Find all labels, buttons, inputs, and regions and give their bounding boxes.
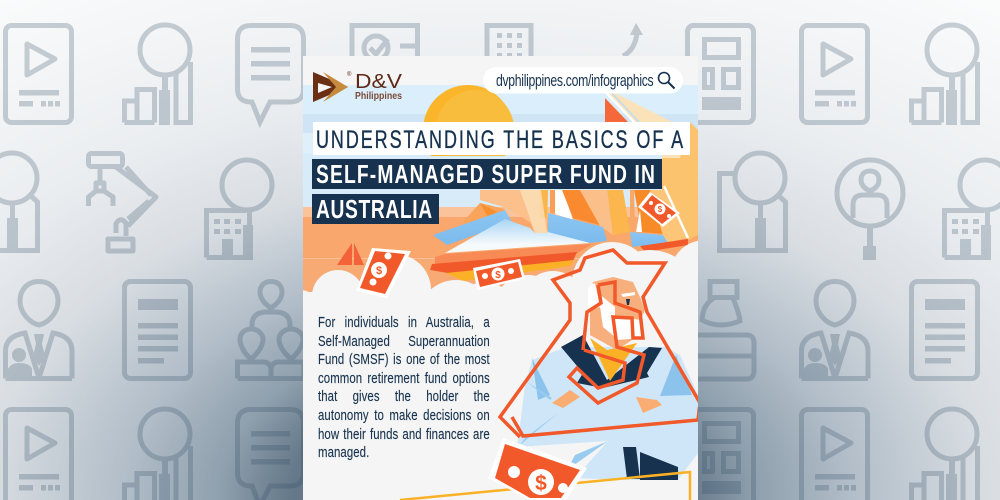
intro paragraph: managed.	[318, 444, 369, 461]
intro paragraph: that gives the holder the	[318, 388, 490, 405]
clouds	[303, 240, 698, 294]
money bill 1	[356, 248, 411, 298]
money bill 4: $	[535, 472, 547, 495]
title line 2: SELF-MANAGED SUPER FUND IN	[316, 159, 655, 189]
platform roof	[433, 210, 512, 245]
icon row 4	[6, 409, 978, 500]
infographic panel	[303, 56, 698, 500]
logo	[313, 70, 402, 102]
money bill 4	[488, 438, 587, 500]
icon: search	[658, 72, 674, 88]
gold frame	[400, 472, 690, 500]
title line 1: UNDERSTANDING THE BASICS OF A	[316, 125, 684, 154]
logo: ®	[347, 71, 352, 78]
intro paragraph: Fund (SMSF) is one of the most	[318, 351, 490, 368]
panel background	[303, 56, 698, 85]
icon row 2	[0, 153, 1000, 260]
icon row 1	[6, 23, 978, 125]
intro paragraph	[318, 314, 490, 461]
platform stripes	[430, 239, 688, 281]
url pill: dvphilippines.com/infographics	[496, 72, 654, 91]
sun	[424, 85, 514, 156]
intro paragraph: Self-Managed Superannuation	[318, 333, 490, 350]
head	[590, 277, 645, 350]
hands	[552, 390, 580, 408]
sky bands	[303, 85, 698, 208]
money bill 1: $	[376, 265, 382, 277]
sand	[303, 207, 698, 294]
intro paragraph: autonomy to make decisions on	[318, 407, 490, 424]
lower sail fan	[480, 190, 548, 233]
intro paragraph: common retirement fund options	[318, 370, 490, 387]
logo: D&V	[355, 70, 402, 93]
tie	[590, 338, 637, 381]
money bag outline	[500, 250, 700, 437]
torso and arms	[517, 347, 698, 480]
title line 3: AUSTRALIA	[316, 194, 432, 224]
icon row 3	[6, 282, 978, 379]
intro paragraph: how their funds and finances are	[318, 426, 490, 443]
money bill 2	[473, 259, 525, 290]
money bill 3	[638, 192, 680, 227]
vest	[561, 335, 662, 388]
sailboat	[337, 243, 364, 265]
logo: Philippines	[355, 91, 402, 102]
opera house sails	[433, 87, 698, 253]
money bill 3: $	[658, 205, 663, 214]
money bill 2: $	[495, 270, 501, 281]
upper beige sail	[609, 94, 681, 158]
url pill	[483, 67, 683, 94]
intro paragraph: For individuals in Australia, a	[318, 314, 490, 331]
man with crossed arms	[517, 277, 698, 480]
